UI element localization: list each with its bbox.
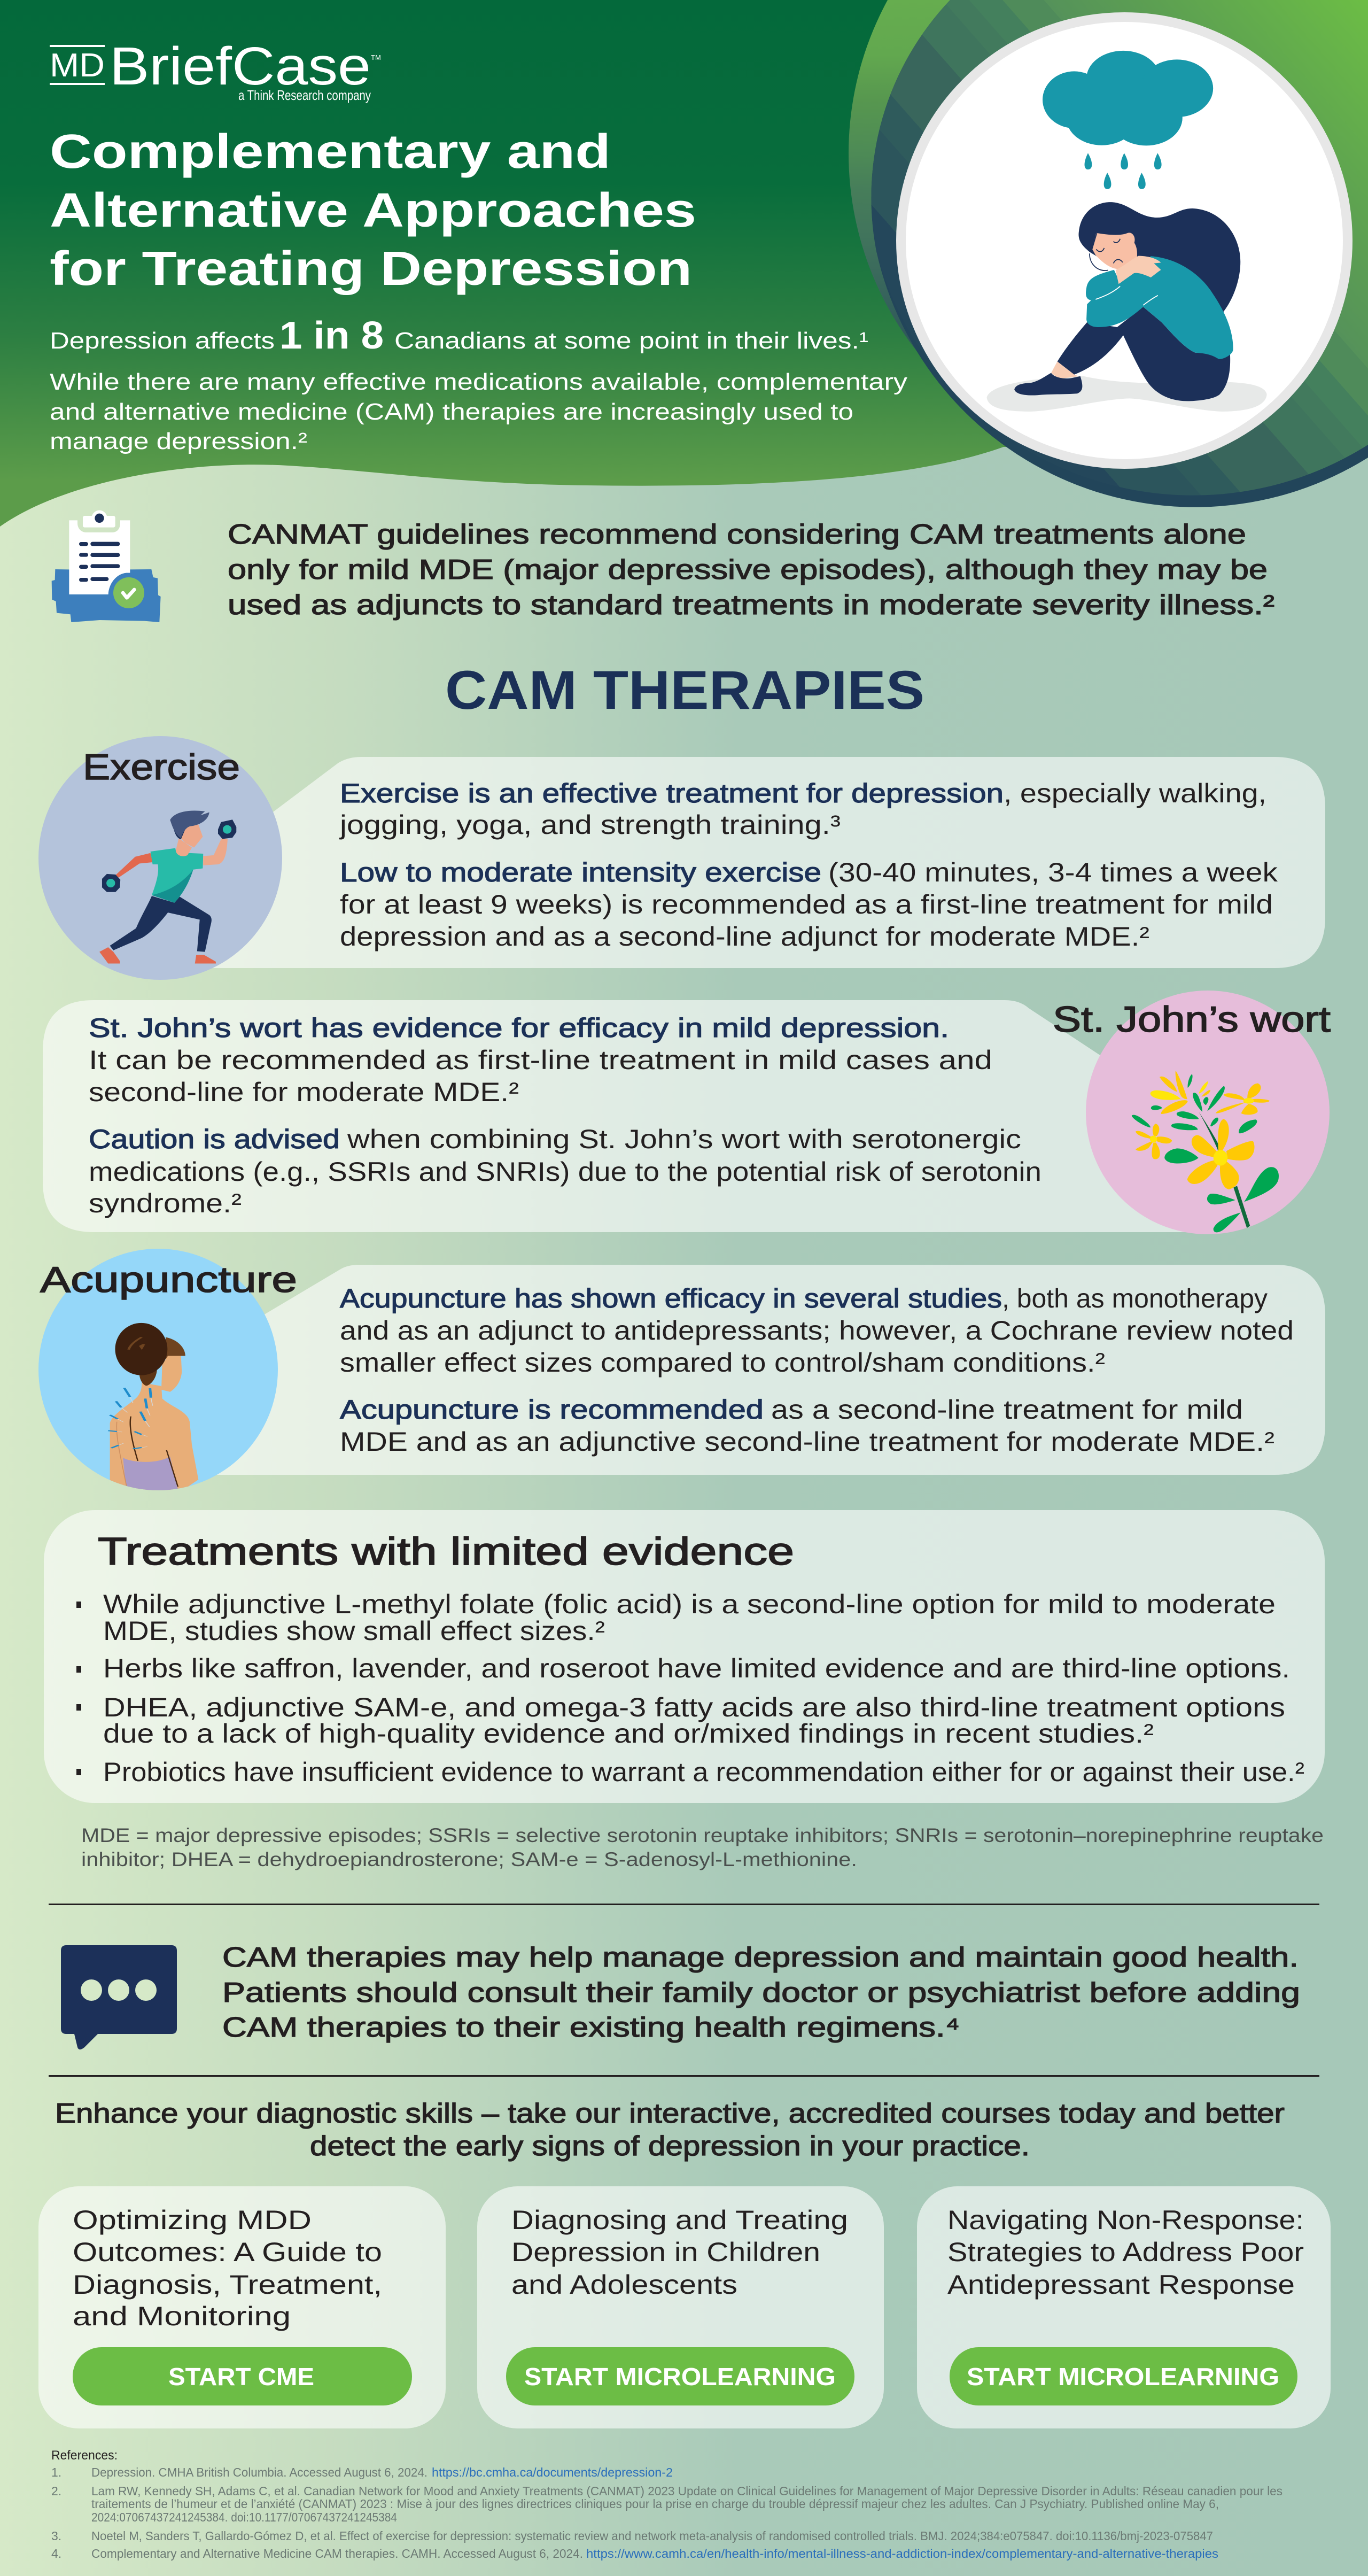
body text xyxy=(340,1283,1294,1457)
abbreviations note: inhibitor; DHEA = dehydroepiandrosterone; SAM-e = S-adenosyl-L-methionine. xyxy=(81,1848,857,1870)
rain drops xyxy=(1085,153,1162,189)
legs xyxy=(1058,307,1230,401)
references: https://www.camh.ca/en/health-info/mental-illness-and-addiction-index/complementary-and-alternative-therapies xyxy=(586,2547,1218,2560)
intro text: While there are many effective medications available, complementary xyxy=(50,369,907,395)
body text: (30-40 minutes, 3-4 times a week xyxy=(828,857,1278,887)
hands xyxy=(1116,256,1161,284)
icon: speech bubble xyxy=(61,1945,177,2049)
key message: CAM therapies to their existing health regimens.⁴ xyxy=(222,2012,960,2043)
logo: MD BriefCase xyxy=(50,36,381,103)
body text xyxy=(339,778,1278,952)
course title xyxy=(947,2205,1304,2300)
body text: and as an adjunct to antidepressants; however, a Cochrane review noted xyxy=(340,1316,1294,1345)
guideline statement: CANMAT guidelines recommend considering CAM treatments alone xyxy=(228,519,1246,550)
circle xyxy=(38,1249,278,1490)
references: 1. xyxy=(51,2465,61,2479)
course title: Antidepressant Response xyxy=(947,2270,1295,2300)
label: Exercise xyxy=(83,747,240,787)
course title: Strategies to Address Poor xyxy=(947,2237,1304,2267)
references: References: xyxy=(51,2448,118,2463)
body text: smaller effect sizes compared to control/sham conditions.² xyxy=(340,1348,1105,1378)
bullet list: Probiotics have insufficient evidence to warrant a recommendation either for or against their use.² xyxy=(103,1757,1304,1787)
intro text: Depression affects xyxy=(50,328,275,354)
key message xyxy=(222,1942,1300,2043)
title: for Treating Depression xyxy=(50,242,692,296)
intro text: 1 in 8 xyxy=(279,314,384,357)
outer green arc xyxy=(849,0,1368,474)
floor shadow xyxy=(987,376,1267,412)
bullet list: While adjunctive L-methyl folate (folic acid) is a second-line option for mild to moderate xyxy=(103,1589,1276,1619)
body text: second-line for moderate MDE.² xyxy=(89,1077,519,1107)
body text: Acupuncture has shown efficacy in several studies xyxy=(340,1283,1002,1313)
button xyxy=(73,2347,412,2405)
logo: MD BriefCase: BriefCase xyxy=(110,36,371,96)
panel background xyxy=(44,1510,1325,1803)
logo: MD BriefCase: MD xyxy=(50,47,105,84)
course card 2 xyxy=(477,2186,884,2428)
illustration in local coordinates xyxy=(987,51,1267,412)
panel: treatments with limited evidence xyxy=(44,1510,1325,1803)
course title: Diagnosing and Treating xyxy=(511,2205,848,2235)
course title: Diagnosis, Treatment, xyxy=(73,2270,382,2300)
body text: Exercise is an effective treatment for depression xyxy=(340,778,1004,808)
course title: and Monitoring xyxy=(73,2301,291,2331)
body text: It can be recommended as first-line treatment in mild cases and xyxy=(89,1045,992,1075)
call to action text xyxy=(55,2098,1285,2162)
key message: Patients should consult their family doctor or psychiatrist before adding xyxy=(222,1977,1300,2008)
button xyxy=(950,2347,1297,2405)
references: Complementary and Alternative Medicine CAM therapies. CAMH. Accessed August 6, 2024. xyxy=(91,2547,583,2560)
bullet list: DHEA, adjunctive SAM-e, and omega-3 fatty acids are also third-line treatment options xyxy=(103,1692,1285,1722)
intro text xyxy=(50,314,907,454)
title: Complementary and xyxy=(50,125,611,179)
references: 3. xyxy=(51,2529,61,2543)
key message: CAM therapies may help manage depression and maintain good health. xyxy=(222,1942,1299,1973)
course title: Depression in Children xyxy=(511,2237,820,2267)
icon: back with acupuncture needles xyxy=(108,1323,198,1493)
course card 3 xyxy=(917,2186,1331,2428)
circle xyxy=(1086,991,1330,1234)
bullet list: Herbs like saffron, lavender, and roseroot have limited evidence and are third-line options. xyxy=(103,1653,1290,1683)
body text: St. John’s wort has evidence for efficacy in mild depression. xyxy=(89,1013,949,1043)
call to action text: detect the early signs of depression in your practice. xyxy=(310,2131,1030,2162)
body text: MDE and as an adjunctive second-line treatment for moderate MDE.² xyxy=(340,1427,1274,1457)
references: 2024:07067437241245384. doi:10.1177/07067437241245384 xyxy=(91,2510,397,2524)
button: START CME xyxy=(168,2363,314,2391)
bullet list: MDE, studies show small effect sizes.² xyxy=(103,1616,605,1646)
button: START MICROLEARNING xyxy=(524,2363,836,2391)
panel background xyxy=(43,1000,1208,1232)
abbreviations note: MDE = major depressive episodes; SSRIs = selective serotonin reuptake inhibitors; SNRIs = serotonin–norepinephrine reuptake xyxy=(81,1824,1324,1846)
course title xyxy=(511,2205,848,2300)
body text: depression and as a second-line adjunct for moderate MDE.² xyxy=(340,922,1149,952)
guideline statement: only for mild MDE (major depressive episodes), although they may be xyxy=(228,554,1268,585)
green wave xyxy=(0,0,1015,527)
course title: Optimizing MDD xyxy=(73,2205,312,2235)
body text: syndrome.² xyxy=(89,1188,242,1218)
ankle xyxy=(1051,361,1079,379)
guideline statement: used as adjuncts to standard treatments in moderate severity illness.² xyxy=(228,590,1274,621)
panel: acupuncture xyxy=(38,1249,1325,1493)
heading: Treatments with limited evidence xyxy=(98,1530,794,1573)
body text: when combining St. John’s wort with serotonergic xyxy=(347,1124,1021,1154)
references: 4. xyxy=(51,2547,61,2560)
logo: MD BriefCase: TM xyxy=(371,53,381,61)
panel background xyxy=(187,757,1325,968)
guideline icon: clipboard and check xyxy=(52,510,161,622)
icon: runner with dumbbells xyxy=(99,810,236,963)
shoe xyxy=(1014,373,1082,396)
body text: Acupuncture is recommended xyxy=(340,1395,764,1425)
label: St. John’s wort xyxy=(1053,999,1331,1040)
circle xyxy=(38,736,282,980)
intro text: and alternative medicine (CAM) therapies are increasingly used to xyxy=(50,399,853,425)
body text xyxy=(89,1013,1041,1218)
references xyxy=(51,2448,1282,2560)
face xyxy=(1092,233,1137,269)
course title xyxy=(73,2205,382,2331)
body text: , both as monotherapy xyxy=(1002,1283,1268,1313)
button xyxy=(506,2347,854,2405)
sweater xyxy=(1086,256,1233,359)
references: Depression. CMHA British Columbia. Accessed August 6, 2024. xyxy=(91,2465,428,2479)
hero illustration: sad woman under rain cloud xyxy=(901,17,1348,464)
bullet list xyxy=(76,1589,1304,1787)
header banner xyxy=(0,0,1368,527)
button: START MICROLEARNING xyxy=(967,2363,1279,2391)
references: Lam RW, Kennedy SH, Adams C, et al. Canadian Network for Mood and Anxiety Treatments (CANMAT) 2023 Update on Clinical Guidelines for Management of Major Depressive Disorder in Adults: Réseau canadien pour les xyxy=(91,2484,1282,2498)
section heading: CAM THERAPIES xyxy=(445,660,924,721)
course title: and Adolescents xyxy=(511,2270,737,2300)
guideline statement xyxy=(228,519,1274,621)
rain cloud xyxy=(1043,51,1213,145)
body text: Low to moderate intensity exercise xyxy=(340,857,821,887)
body text: jogging, yoga, and strength training.³ xyxy=(339,810,841,840)
references: traitements de l’humeur et de l’anxiété (CANMAT) 2023 : Mise à jour des lignes directrices cliniques pour la prise en charge du trouble dépressif majeur chez les adultes. Can J Psychiatry. Published online May 6, xyxy=(91,2497,1219,2511)
navy disc crescent xyxy=(871,0,1368,507)
title: Alternative Approaches xyxy=(50,184,696,237)
abbreviations note xyxy=(81,1824,1324,1870)
call to action text: Enhance your diagnostic skills – take our interactive, accredited courses today and better xyxy=(55,2098,1285,2129)
panel background xyxy=(187,1265,1325,1475)
course card 1 xyxy=(38,2186,446,2428)
body text: as a second-line treatment for mild xyxy=(771,1395,1243,1425)
icon: yellow flower xyxy=(1132,1071,1279,1232)
references: Noetel M, Sanders T, Gallardo-Gómez D, et al. Effect of exercise for depression: systematic review and network meta-analysis of randomised controlled trials. BMJ. 2024;384:e075847. doi:10.1136/bmj-2023-075847 xyxy=(91,2529,1213,2543)
hair xyxy=(1079,202,1240,312)
panel: exercise xyxy=(38,736,1325,980)
course title: Outcomes: A Guide to xyxy=(73,2237,382,2267)
panel: St. John's wort xyxy=(43,991,1331,1234)
intro text: Canadians at some point in their lives.¹ xyxy=(394,328,868,354)
body text: Caution is advised xyxy=(89,1124,340,1154)
course title: Navigating Non-Response: xyxy=(947,2205,1304,2235)
label: Acupuncture xyxy=(40,1259,297,1300)
white medallion xyxy=(901,17,1348,464)
striped gradient disc xyxy=(871,0,1368,496)
body text: , especially walking, xyxy=(1004,778,1266,808)
body text: medications (e.g., SSRIs and SNRIs) due to the potential risk of serotonin xyxy=(89,1157,1041,1187)
body text: for at least 9 weeks) is recommended as a first-line treatment for mild xyxy=(340,889,1273,919)
title xyxy=(50,125,696,296)
bullet list: due to a lack of high-quality evidence and or/mixed findings in recent studies.² xyxy=(103,1719,1154,1749)
intro text: manage depression.² xyxy=(50,428,307,454)
references: https://bc.cmha.ca/documents/depression-2 xyxy=(432,2465,673,2479)
references: 2. xyxy=(51,2484,61,2498)
logo: MD BriefCase: a Think Research company xyxy=(238,87,371,103)
